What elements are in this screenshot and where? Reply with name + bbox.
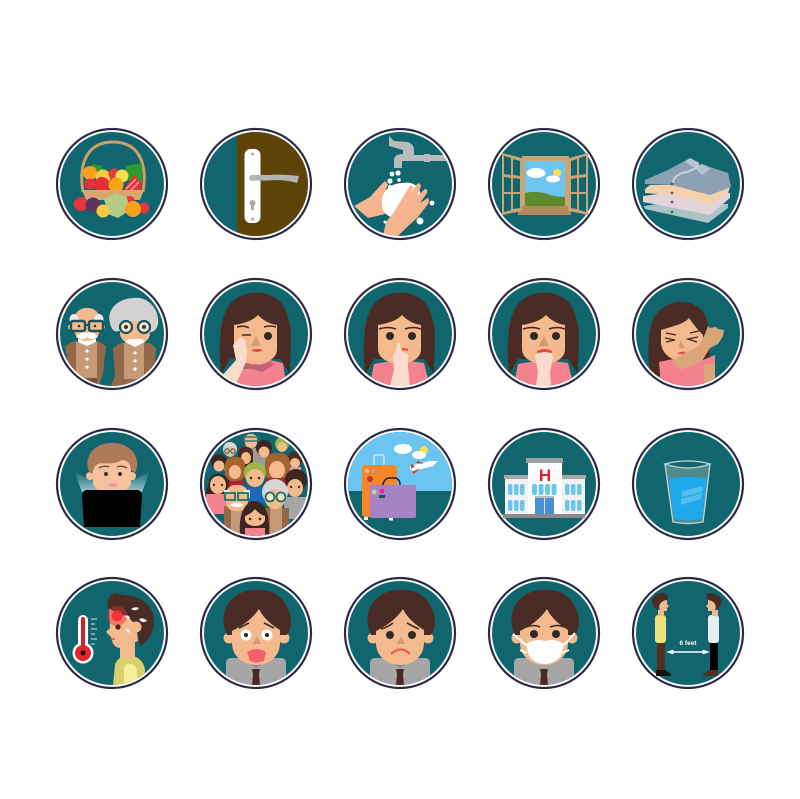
icon: do not touch eyes <box>201 279 311 390</box>
person left <box>652 593 671 676</box>
icon: six feet distance <box>633 578 743 688</box>
icon: cough into elbow <box>633 279 743 389</box>
icon grid <box>56 128 744 690</box>
icon: fruit basket <box>57 129 167 239</box>
icon: folded shirts <box>633 129 743 239</box>
distance arrow <box>667 650 709 654</box>
icon: sad man <box>345 578 455 688</box>
icon: man wearing mask <box>489 578 599 688</box>
icon: do not touch mouth <box>489 279 599 390</box>
icon: hospital <box>489 429 599 539</box>
icon: person at laptop <box>57 429 167 539</box>
hospital letter: H <box>539 466 551 485</box>
icon: fever and thermometer <box>57 578 167 688</box>
icon: door handle <box>201 128 312 240</box>
icon: glass of water <box>633 429 743 539</box>
person right <box>703 593 722 676</box>
icon: open window <box>489 129 599 239</box>
icon: do not touch nose <box>345 279 455 390</box>
icon: elderly couple <box>57 279 167 389</box>
distance label: 6 feet <box>680 640 697 647</box>
icon: shocked man <box>201 578 311 688</box>
icon: washing hands <box>345 129 455 239</box>
icon: travel luggage <box>344 428 456 539</box>
icon: crowd of people <box>201 429 311 539</box>
